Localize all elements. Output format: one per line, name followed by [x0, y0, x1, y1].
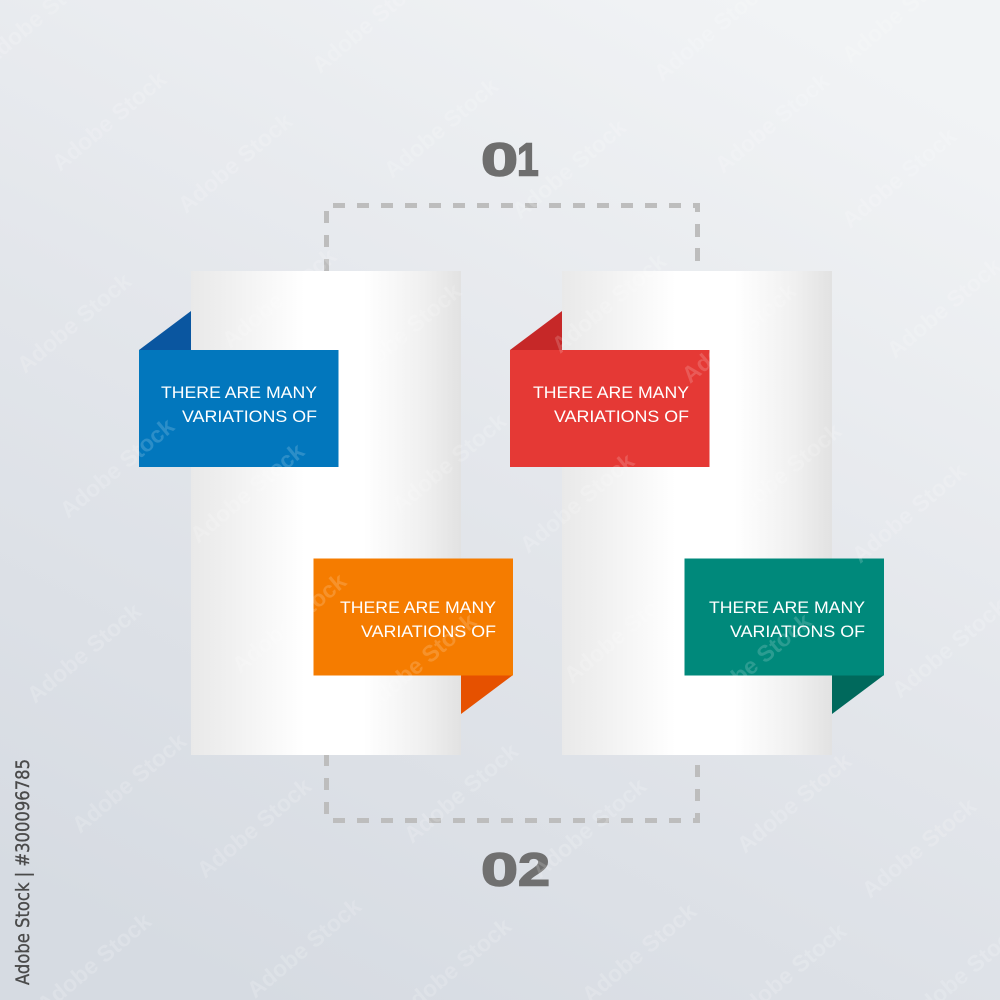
red box	[510, 350, 710, 467]
watermark pattern: Adobe Stock	[67, 728, 191, 838]
callout: orange	[314, 558, 513, 714]
number 02	[481, 845, 550, 896]
watermark pattern: Adobe Stock	[692, 608, 816, 718]
number 01: 0	[481, 135, 518, 186]
stock id label: Adobe Stock | #300096785	[12, 759, 34, 985]
teal text: VARIATIONS OF	[730, 622, 865, 641]
watermark pattern: Adobe Stock	[732, 748, 856, 858]
watermark pattern: Adobe Stock	[857, 793, 981, 903]
watermark pattern: Adobe Stock	[527, 773, 651, 883]
watermark pattern: Adobe Stock	[55, 413, 179, 523]
blue text	[161, 383, 317, 426]
number 02: 0	[481, 845, 518, 896]
dashed connector: bottom	[324, 755, 700, 823]
orange text	[340, 598, 496, 641]
watermark pattern: Adobe Stock	[47, 66, 171, 176]
watermark pattern: Adobe Stock	[507, 114, 631, 224]
red text: THERE ARE MANY	[533, 383, 689, 402]
number 01: 1	[517, 135, 539, 186]
number 01	[481, 135, 539, 186]
teal fold	[832, 675, 884, 714]
watermark pattern: Adobe Stock	[12, 268, 136, 378]
callout: teal	[684, 558, 884, 714]
watermark pattern: Adobe Stock	[710, 68, 834, 178]
watermark pattern: Adobe Stock	[387, 408, 511, 518]
watermark pattern: Adobe Stock	[217, 243, 341, 353]
number 02: 2	[518, 845, 550, 896]
watermark pattern: Adobe Stock	[559, 578, 683, 688]
red fold	[510, 311, 562, 350]
watermark pattern: Adobe Stock	[185, 438, 309, 548]
watermark pattern: Adobe Stock	[192, 773, 316, 883]
watermark pattern: Adobe Stock	[242, 893, 366, 1000]
orange text: VARIATIONS OF	[361, 622, 496, 641]
red text	[533, 383, 689, 426]
watermark pattern: Adobe Stock	[399, 738, 523, 848]
blue box	[139, 350, 338, 467]
blue text: VARIATIONS OF	[182, 407, 317, 426]
watermark pattern: Adobe Stock	[515, 448, 639, 558]
watermark pattern: Adobe Stock	[837, 123, 961, 233]
orange fold	[461, 675, 513, 714]
teal text: THERE ARE MANY	[709, 598, 865, 617]
panel: right column	[562, 271, 832, 755]
watermark pattern: Adobe Stock	[379, 73, 503, 183]
watermark pattern: Adobe Stock	[722, 418, 846, 528]
watermark pattern: Adobe Stock	[357, 608, 481, 718]
orange text: THERE ARE MANY	[340, 598, 496, 617]
watermark pattern: Adobe Stock	[342, 278, 466, 388]
watermark pattern: Adobe Stock	[847, 458, 971, 568]
teal text	[709, 598, 865, 641]
teal box	[684, 558, 884, 676]
blue text: THERE ARE MANY	[161, 383, 317, 402]
blue fold	[139, 311, 191, 350]
watermark pattern: Adobe Stock	[227, 568, 351, 678]
red text: VARIATIONS OF	[554, 407, 689, 426]
panel: left column	[191, 271, 461, 755]
callout: red	[510, 311, 710, 467]
watermark pattern: Adobe Stock	[22, 598, 146, 708]
watermark pattern: Adobe Stock	[547, 248, 671, 358]
dashed connector: top	[324, 203, 700, 271]
callout: blue	[139, 311, 338, 467]
watermark pattern: Adobe Stock	[677, 278, 801, 388]
watermark pattern: Adobe Stock	[173, 108, 297, 218]
orange box	[314, 558, 513, 676]
